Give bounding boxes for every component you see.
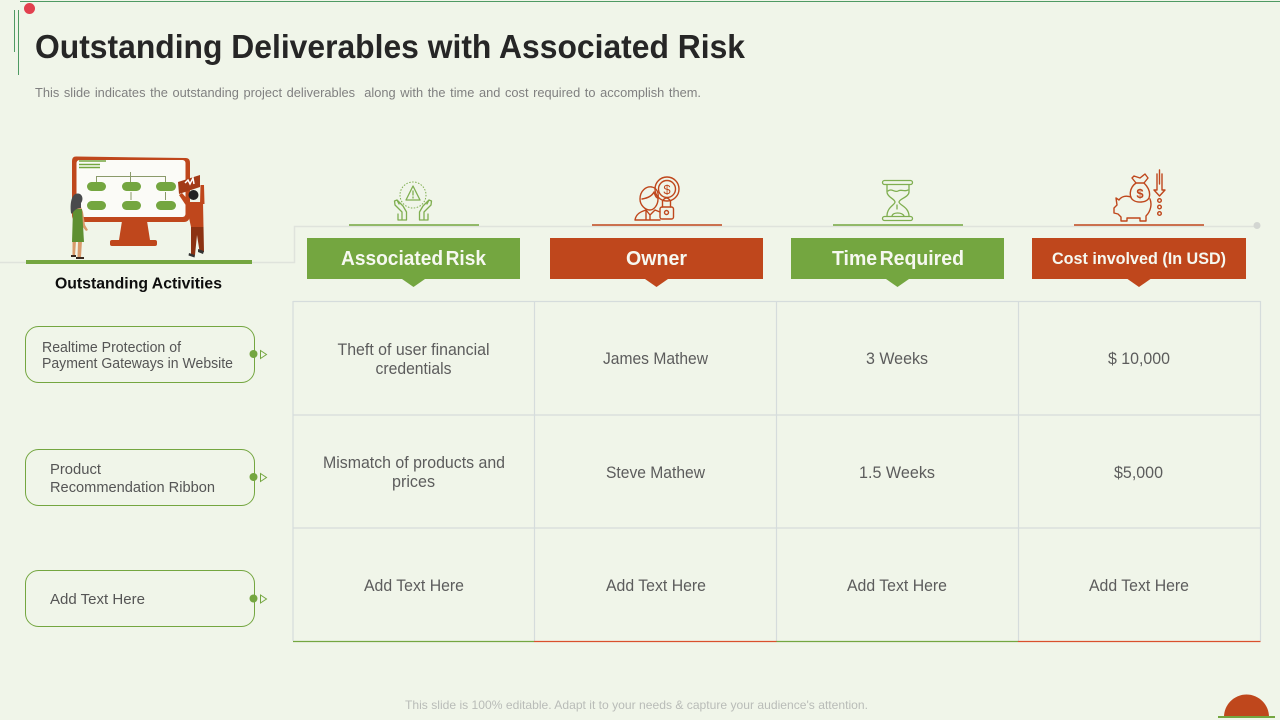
row 3: Add Text Here — [1089, 577, 1189, 595]
row 2: Mismatch of products and — [323, 454, 505, 472]
green ground bar — [26, 260, 252, 264]
row 3: Add Text Here — [606, 577, 706, 595]
row 1: James Mathew — [603, 350, 708, 368]
row 3: Add Text Here — [364, 577, 464, 595]
activity 1: Payment Gateways in Website — [42, 356, 233, 372]
row 3 — [364, 577, 1189, 595]
row 2 — [323, 454, 1163, 491]
activity 2: Product — [50, 462, 101, 478]
icon: owner with dollar and lock — [635, 177, 679, 220]
row 2: $5,000 — [1114, 464, 1163, 482]
woman — [71, 193, 88, 259]
subtitle: This slide indicates the outstanding project deliverables along with the time and cost required to accomplish them. — [35, 86, 701, 100]
header: associated risk — [307, 238, 520, 287]
activity 3 — [26, 570, 266, 626]
activity 2 — [26, 450, 266, 506]
table — [293, 301, 1260, 642]
row 1: credentials — [376, 360, 452, 378]
activity 2: Recommendation Ribbon — [50, 480, 215, 496]
man holding sign — [178, 175, 204, 258]
header: associated risk: Associated Risk — [341, 248, 487, 270]
row 1: Theft of user financial — [338, 341, 490, 359]
activity 1: Realtime Protection of — [42, 340, 182, 356]
icon: piggy bank with money bag: $ — [1136, 186, 1144, 201]
footer note: This slide is 100% editable. Adapt it to your needs & capture your audience's attention. — [405, 698, 868, 712]
row 1 — [338, 341, 1170, 378]
activity 3: Add Text Here — [50, 592, 145, 608]
header: time required: Time Required — [832, 248, 964, 270]
icon: owner with dollar and lock: $ — [663, 182, 671, 197]
illustration: monitor with two people — [71, 156, 204, 259]
icon: hourglass — [882, 180, 912, 220]
row 2: Steve Mathew — [606, 464, 705, 482]
row 2: prices — [392, 473, 435, 491]
heading: outstanding activities: Outstanding Activities — [55, 276, 222, 292]
header: time required — [791, 238, 1004, 287]
row 1: 3 Weeks — [866, 350, 928, 368]
header: cost involved: Cost involved (In USD) — [1052, 250, 1226, 268]
row 2: 1.5 Weeks — [859, 464, 935, 482]
activity 1 — [26, 326, 266, 382]
header: cost involved — [1032, 238, 1246, 287]
icon: hands protecting warning sign — [394, 182, 432, 220]
header: owner — [550, 238, 763, 287]
row 3: Add Text Here — [847, 577, 947, 595]
title: Outstanding Deliverables with Associated Risk — [35, 28, 746, 65]
icon: red corner dot — [24, 3, 35, 14]
header: owner: Owner — [626, 248, 687, 270]
icon: corner semicircle — [1218, 694, 1275, 718]
icon: piggy bank with money bag — [1114, 170, 1165, 221]
row 1: $ 10,000 — [1108, 350, 1170, 368]
